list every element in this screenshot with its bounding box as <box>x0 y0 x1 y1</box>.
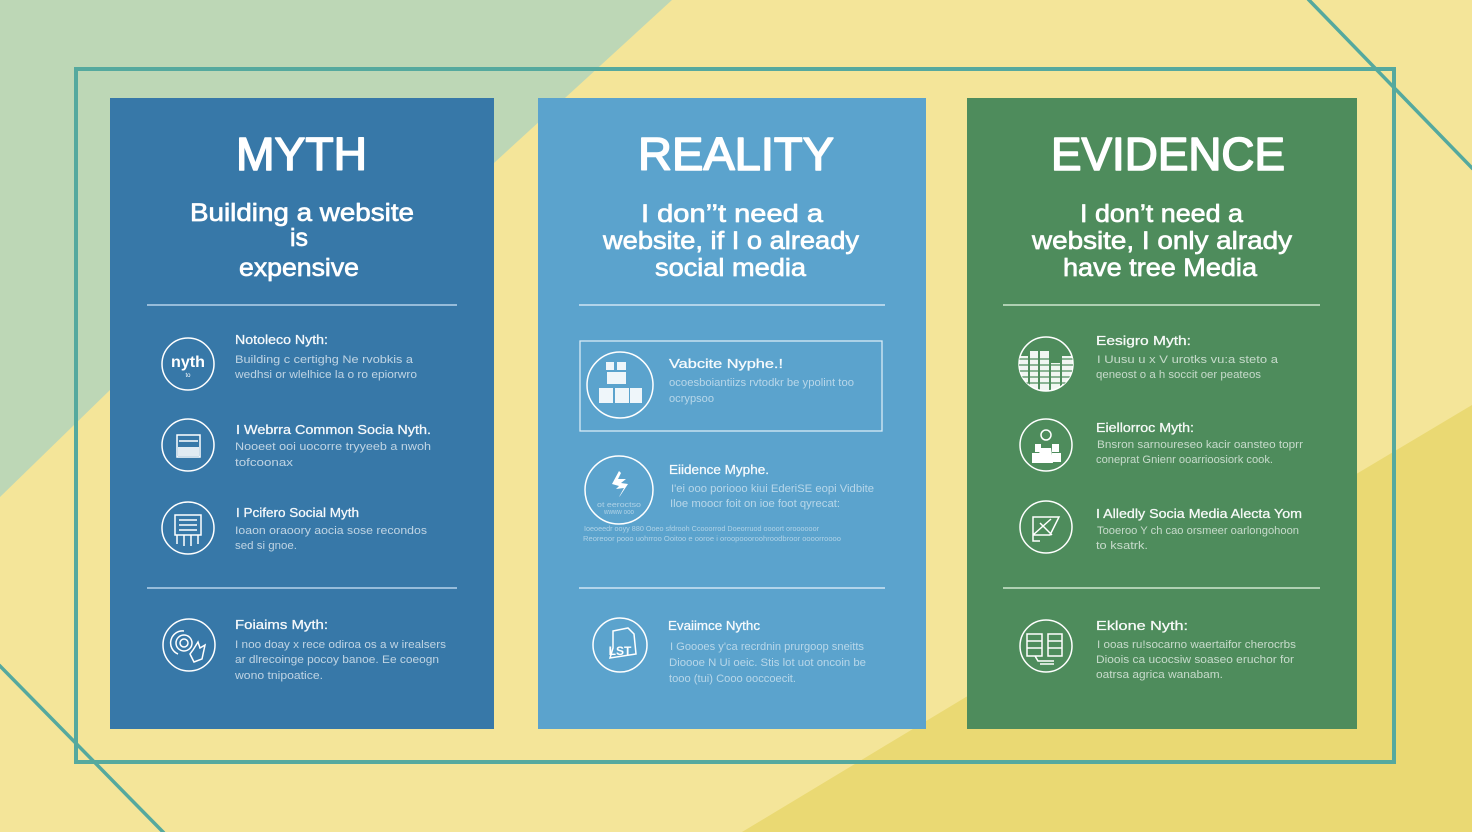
icon: boxes stack <box>587 352 653 418</box>
icon: bar chart circle <box>1018 337 1074 392</box>
text block: reality item 2: I'ei ooo poriooo kiui EderiSE eopi Vidbite <box>671 483 874 495</box>
statement: myth <box>190 199 414 282</box>
statement: evidence: have tree Media <box>1063 254 1257 282</box>
text block: myth item 3: I Pcifero Social Myth <box>236 506 359 520</box>
statement: myth: is <box>290 224 308 252</box>
text block: myth item 4: I noo doay x rece odiroa os a w irealsers <box>235 639 447 651</box>
text block: evidence item 3: I Alledly Socia Media Alecta Yom <box>1096 507 1302 521</box>
statement: evidence: website, I only alrady <box>1031 227 1293 255</box>
text block: evidence item 3: Tooeroo Y ch cao orsmeer oarlongohoon <box>1097 525 1299 537</box>
text block: evidence item 1 <box>1096 334 1279 381</box>
text block: myth item 1: Notoleco Nyth: <box>235 333 328 347</box>
text block: myth item 4: Foiaims Myth: <box>235 618 328 632</box>
icon: lightning badge <box>585 456 653 524</box>
text block: reality item 1: Vabcite Nyphe.! <box>669 357 783 371</box>
text block: myth item 1: wedhsi or wlelhice la o ro epiorwro <box>234 369 417 381</box>
text block: myth item 4 <box>234 618 447 682</box>
icon: lightning badge: wwww ooo <box>603 509 634 516</box>
text block: reality item 3: Evaiimce Nythc <box>668 619 760 633</box>
callout: highlighted item <box>580 341 882 431</box>
icon: myth badge: to <box>185 373 191 379</box>
icon: lightning badge: ot eeroctso <box>597 502 641 509</box>
statement: myth: expensive <box>239 254 359 282</box>
text block: reality item 1: ocoesboiantiizs rvtodkr be ypolint too <box>669 377 854 389</box>
icon: data tables <box>1020 620 1072 672</box>
statement: reality: I don’’t need a <box>641 200 823 228</box>
text block: myth item 1 <box>234 333 417 381</box>
panel: myth <box>110 98 494 729</box>
text block: reality item 2: Reoreoor pooo uohrroo Ooitoo e ooroe i oroopoooroohroodbroor oooorroooo <box>583 536 841 543</box>
statement: evidence <box>1031 200 1293 282</box>
icon: people group <box>1020 419 1072 471</box>
text block: evidence item 4: Dioois ca ucocsiw soaseo eruchor for <box>1096 654 1294 666</box>
text block: evidence item 2: Bnsron sarnoureseo kacir oansteo toprr <box>1097 439 1303 451</box>
text block: evidence item 3 <box>1096 507 1302 552</box>
text block: myth item 2 <box>235 423 431 469</box>
text block: reality item 2: Eiidence Myphe. <box>669 463 769 477</box>
text block: myth item 2: I Webrra Common Socia Nyth. <box>236 423 431 437</box>
text block: evidence item 2: coneprat Gnienr ooarrioosiork cook. <box>1096 454 1273 466</box>
heading: reality: REALITY <box>638 128 834 180</box>
icon: list note <box>593 618 647 672</box>
teal frame <box>76 69 1394 762</box>
text block: evidence item 2: Eiellorroc Myth: <box>1096 421 1194 435</box>
text block: evidence item 4 <box>1096 619 1297 681</box>
text block: evidence item 1: Eesigro Myth: <box>1096 334 1191 348</box>
text block: reality item 1 <box>669 357 854 405</box>
text block: myth item 3: sed si gnoe. <box>235 540 297 552</box>
text block: myth item 4: ar dlrecoinge pocoy banoe. Ee coeogn <box>235 654 439 666</box>
text block: evidence item 3: to ksatrk. <box>1096 540 1148 552</box>
diagonal line: bottom left <box>0 665 164 832</box>
diagonal line: top right <box>1308 0 1472 169</box>
panel: reality <box>538 98 926 729</box>
icon: myth badge: nyth <box>171 354 205 371</box>
text block: reality item 2: Iloe moocr foit on ioe foot qyrecat: <box>670 498 840 510</box>
statement: reality: social media <box>655 254 806 282</box>
icon: document stand <box>162 502 214 554</box>
text block: evidence item 1: qeneost o a h soccit oer peateos <box>1096 369 1262 381</box>
heading: evidence: EVIDENCE <box>1051 128 1285 180</box>
text block: reality item 1: ocrypsoo <box>669 393 714 405</box>
text block: myth item 3: Ioaon oraoory aocia sose recondos <box>235 525 428 537</box>
text block: evidence item 4: oatrsa agrica wanabam. <box>1096 669 1223 681</box>
text block: evidence item 4: Eklone Nyth: <box>1096 619 1188 633</box>
text block: myth item 2: Nooeet ooi uocorre tryyeeb a nwoh <box>235 441 431 453</box>
text block: myth item 3 <box>235 506 428 552</box>
heading: myth: MYTH <box>236 128 367 180</box>
icon: presentation chart <box>1020 501 1072 553</box>
text block: reality item 3: tooo (tui) Cooo ooccoecit. <box>669 673 796 685</box>
panel: evidence <box>967 98 1357 729</box>
text block: evidence item 4: I ooas ru!socarno waertaifor cherocrbs <box>1097 639 1297 651</box>
text block: myth item 1: Building c certighg Ne rvobkis a <box>235 354 414 366</box>
text block: evidence item 1: I Uusu u x V urotks vu:a steto a <box>1097 354 1279 366</box>
statement: evidence: I don’t need a <box>1080 200 1243 228</box>
text block: reality item 3: Dioooe N Ui oeic. Stis lot uot oncoin be <box>669 657 866 669</box>
text block: reality item 2: Ioeoeedr ooyy 880 Ooeo sfdrooh Ccooorrod Doeorruod oooort oroooooor <box>584 526 820 533</box>
text block: myth item 4: wono tnipoatice. <box>234 670 323 682</box>
text block: evidence item 2 <box>1096 421 1303 466</box>
statement: reality: website, if I o already <box>602 227 860 255</box>
text block: myth item 2: tofcoonax <box>235 457 294 469</box>
text block: reality item 2 <box>583 463 874 543</box>
text block: reality item 3: I Goooes y'ca recrdnin prurgoop sneitts <box>670 641 864 653</box>
icon: browser window <box>162 419 214 471</box>
statement: reality <box>602 200 860 282</box>
statement: myth: Building a website <box>190 199 414 227</box>
icon: myth badge <box>162 338 214 390</box>
icon: list note: LST <box>609 644 632 658</box>
text block: reality item 3 <box>668 619 866 685</box>
icon: signal hand <box>163 619 215 671</box>
